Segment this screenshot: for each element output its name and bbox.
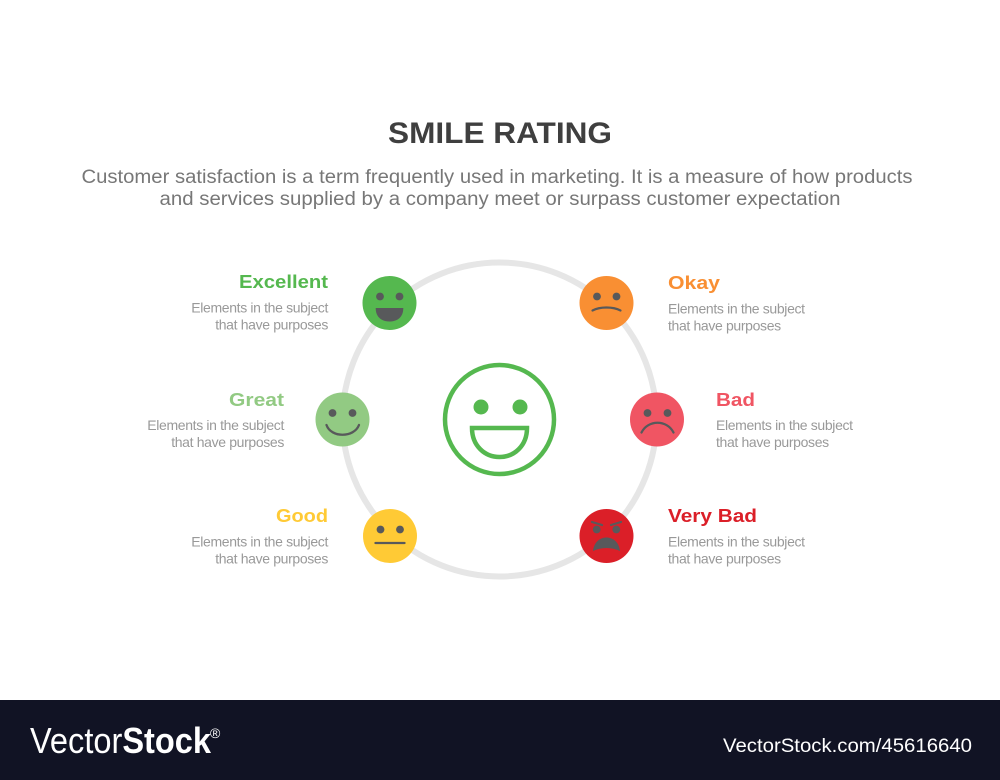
label: great: that have purposes bbox=[171, 434, 284, 450]
label: okay bbox=[668, 273, 805, 334]
icon: great face bbox=[316, 392, 370, 446]
label: good: Elements in the subject bbox=[191, 534, 328, 550]
intro text bbox=[82, 167, 912, 210]
label: okay: that have purposes bbox=[668, 318, 781, 334]
footer logo: VectorStock bbox=[30, 720, 212, 761]
icon: central smile bbox=[445, 365, 554, 474]
label: bad: Elements in the subject bbox=[716, 417, 853, 433]
label: excellent: Elements in the subject bbox=[191, 300, 328, 316]
label: bad: that have purposes bbox=[716, 434, 829, 450]
ring bbox=[342, 262, 656, 576]
label: very bad bbox=[668, 506, 805, 566]
icon: okay face bbox=[580, 276, 634, 330]
icon: very bad face bbox=[580, 509, 634, 563]
label: very bad: Elements in the subject bbox=[668, 534, 805, 550]
intro text: and services supplied by a company meet or surpass customer expectation bbox=[160, 189, 840, 210]
label: great: Elements in the subject bbox=[147, 417, 284, 433]
footer url: VectorStock.com/45616640 bbox=[723, 736, 972, 757]
label: good bbox=[191, 506, 328, 566]
registered mark: ® bbox=[210, 725, 221, 741]
label: excellent: Excellent bbox=[239, 272, 328, 292]
footer bar bbox=[0, 700, 1000, 780]
intro text: Customer satisfaction is a term frequently used in marketing. It is a measure of how products bbox=[82, 167, 912, 188]
label: okay: Elements in the subject bbox=[668, 300, 805, 316]
label: very bad: Very Bad bbox=[668, 506, 757, 526]
label: great: Great bbox=[229, 390, 284, 410]
label: okay: Okay bbox=[668, 273, 720, 293]
label: excellent bbox=[191, 272, 328, 332]
icon: good face bbox=[363, 509, 417, 563]
label: good: Good bbox=[276, 506, 328, 526]
title: SMILE RATING bbox=[388, 117, 612, 150]
icon: bad face bbox=[630, 392, 684, 446]
label: bad: Bad bbox=[716, 390, 755, 410]
label: great bbox=[147, 390, 284, 450]
label: bad bbox=[716, 390, 853, 450]
label: excellent: that have purposes bbox=[215, 316, 328, 332]
label: very bad: that have purposes bbox=[668, 550, 781, 566]
label: good: that have purposes bbox=[215, 550, 328, 566]
icon: excellent face bbox=[362, 276, 416, 330]
